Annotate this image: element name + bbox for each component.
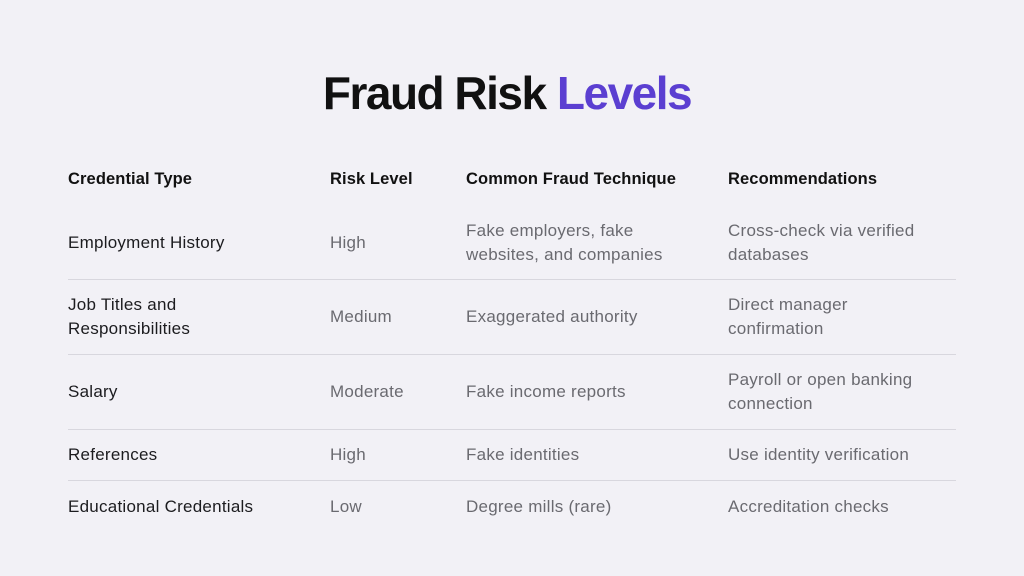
row: job titles: Responsibilities [68, 319, 190, 338]
row: job titles: Direct manager [728, 295, 848, 314]
header: credential type: Credential Type [68, 170, 192, 188]
row: educational credentials: Degree mills (rare) [466, 496, 612, 516]
row: salary: Payroll or open banking [728, 370, 912, 389]
row: salary: Fake income reports [466, 382, 626, 401]
row: employment history: Fake employers, fake [466, 220, 634, 240]
row: salary: Salary [68, 382, 118, 401]
header: recommendations: Recommendations [728, 170, 877, 188]
row: employment history: websites, and companies [466, 244, 663, 264]
row: educational credentials: Accreditation checks [728, 496, 889, 516]
row: salary: connection [728, 394, 813, 413]
row: educational credentials [68, 496, 889, 516]
row: references [68, 430, 956, 481]
row: references: High [330, 445, 366, 464]
row: employment history: Cross-check via verified [728, 220, 914, 240]
title: Fraud Risk Levels [323, 67, 691, 119]
row: employment history: High [330, 232, 366, 252]
row: references: Use identity verification [728, 445, 909, 464]
row: salary [68, 355, 956, 430]
row: employment history [68, 206, 956, 280]
row: job titles: confirmation [728, 319, 824, 338]
row: employment history: databases [728, 244, 809, 264]
row: references: References [68, 445, 157, 464]
header: risk level: Risk Level [330, 170, 413, 188]
row: employment history: Employment History [68, 232, 225, 252]
row: job titles [68, 280, 956, 355]
row: educational credentials: Educational Credentials [68, 496, 253, 516]
row: job titles: Medium [330, 307, 392, 326]
row: references: Fake identities [466, 445, 579, 464]
row: educational credentials: Low [330, 496, 362, 516]
header: fraud technique: Common Fraud Technique [466, 170, 676, 188]
row: job titles: Job Titles and [68, 295, 176, 314]
row: job titles: Exaggerated authority [466, 307, 638, 326]
row: salary: Moderate [330, 382, 404, 401]
